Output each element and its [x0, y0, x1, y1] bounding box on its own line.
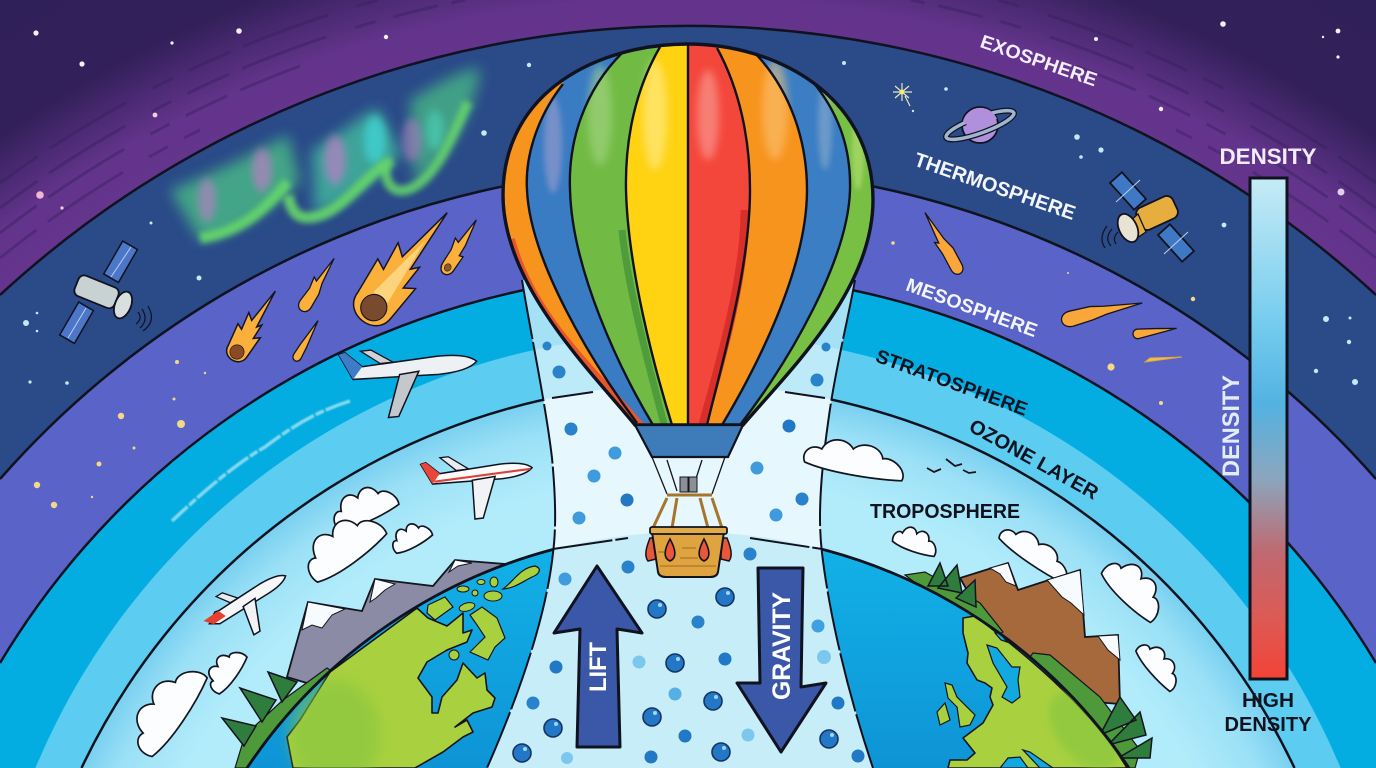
label: mesosphere: MESOSPHERE: [903, 275, 1040, 342]
layer: ozone band: [35, 333, 1341, 768]
label: stratosphere: STRATOSPHERE: [873, 346, 1030, 421]
icon: meteor large: [342, 197, 464, 334]
basket body: [652, 532, 724, 577]
icon: meteor 2: [220, 283, 286, 366]
icon: star burst: [893, 83, 912, 106]
label: troposphere: TROPOSPHERE: [870, 501, 1020, 523]
land: europe: [948, 616, 1127, 768]
cloud over air column: [802, 434, 908, 485]
air column: [487, 280, 872, 768]
skirt: [635, 425, 743, 457]
label: density top: DENSITY: [1220, 144, 1317, 169]
icon: meteor 5: [436, 215, 483, 278]
icon: meteor right 2: [1060, 295, 1144, 328]
land: americas: [287, 608, 495, 768]
trees and shoreline right: [905, 563, 1152, 768]
icon: satellite left: [60, 241, 152, 343]
label: exosphere: EXOSPHERE: [977, 32, 1100, 91]
envelope outline: [503, 44, 873, 425]
basket side tabs: [646, 538, 731, 561]
label: density vertical: DENSITY: [1218, 375, 1245, 477]
mountains left: [287, 560, 505, 690]
stripe highlights: [643, 60, 667, 170]
stripe shading: [508, 240, 640, 430]
stars: [23, 21, 1358, 508]
arctic islands: [427, 566, 539, 660]
arrow: lift: [554, 566, 642, 747]
icon: saturn planet: [943, 105, 1017, 145]
hot air balloon: [501, 42, 875, 578]
label: thermosphere: THERMOSPHERE: [911, 149, 1078, 225]
british isles: [937, 683, 975, 727]
clouds: [121, 478, 1186, 761]
inland seas: [987, 633, 1053, 768]
icon: meteor right 3: [1132, 324, 1177, 339]
layer: stratosphere band: [0, 273, 1376, 768]
icon: contrail: [172, 401, 350, 521]
envelope stripes: [504, 46, 872, 424]
label: lift: LIFT: [585, 642, 612, 692]
icon: meteor 3: [295, 255, 340, 314]
icon: meteor 4: [291, 319, 322, 363]
land shading right: [1048, 688, 1122, 768]
label: ozone layer: OZONE LAYER: [965, 415, 1102, 505]
basket frame: [653, 495, 722, 528]
earth globe: [247, 532, 1135, 768]
layer: troposphere band: [82, 384, 1294, 768]
label: gravity: GRAVITY: [768, 592, 796, 700]
stripe outlines: [527, 44, 850, 425]
density bar: [1250, 178, 1287, 679]
air column edges: [487, 280, 873, 768]
icon: airplane red tail: [420, 447, 537, 525]
density scale: [1218, 144, 1317, 736]
exosphere brush texture: [0, 0, 1376, 258]
label: high density: HIGH: [1242, 690, 1294, 712]
land shading: [290, 680, 380, 768]
ropes: [652, 457, 725, 494]
icon: birds: [927, 459, 976, 473]
air molecules: [513, 342, 864, 764]
burner: [680, 477, 697, 492]
layer: mesosphere band: [0, 167, 1376, 768]
icon: aurora: [170, 68, 480, 240]
icon: satellite right: [1102, 172, 1194, 262]
arrow: gravity: [737, 568, 826, 752]
density scale: DENSITY: [1224, 714, 1312, 736]
trees and shoreline left: [222, 668, 345, 768]
icon: airplane lower left: [196, 560, 303, 653]
mountains right: [960, 563, 1120, 704]
basket rim: [650, 527, 727, 534]
icon: meteor right 1: [919, 209, 966, 277]
icon: meteor right 4 streak: [1145, 357, 1182, 362]
basket flames: [665, 539, 709, 561]
small islands: [449, 577, 502, 660]
icon: airplane blue tail: [339, 339, 482, 422]
